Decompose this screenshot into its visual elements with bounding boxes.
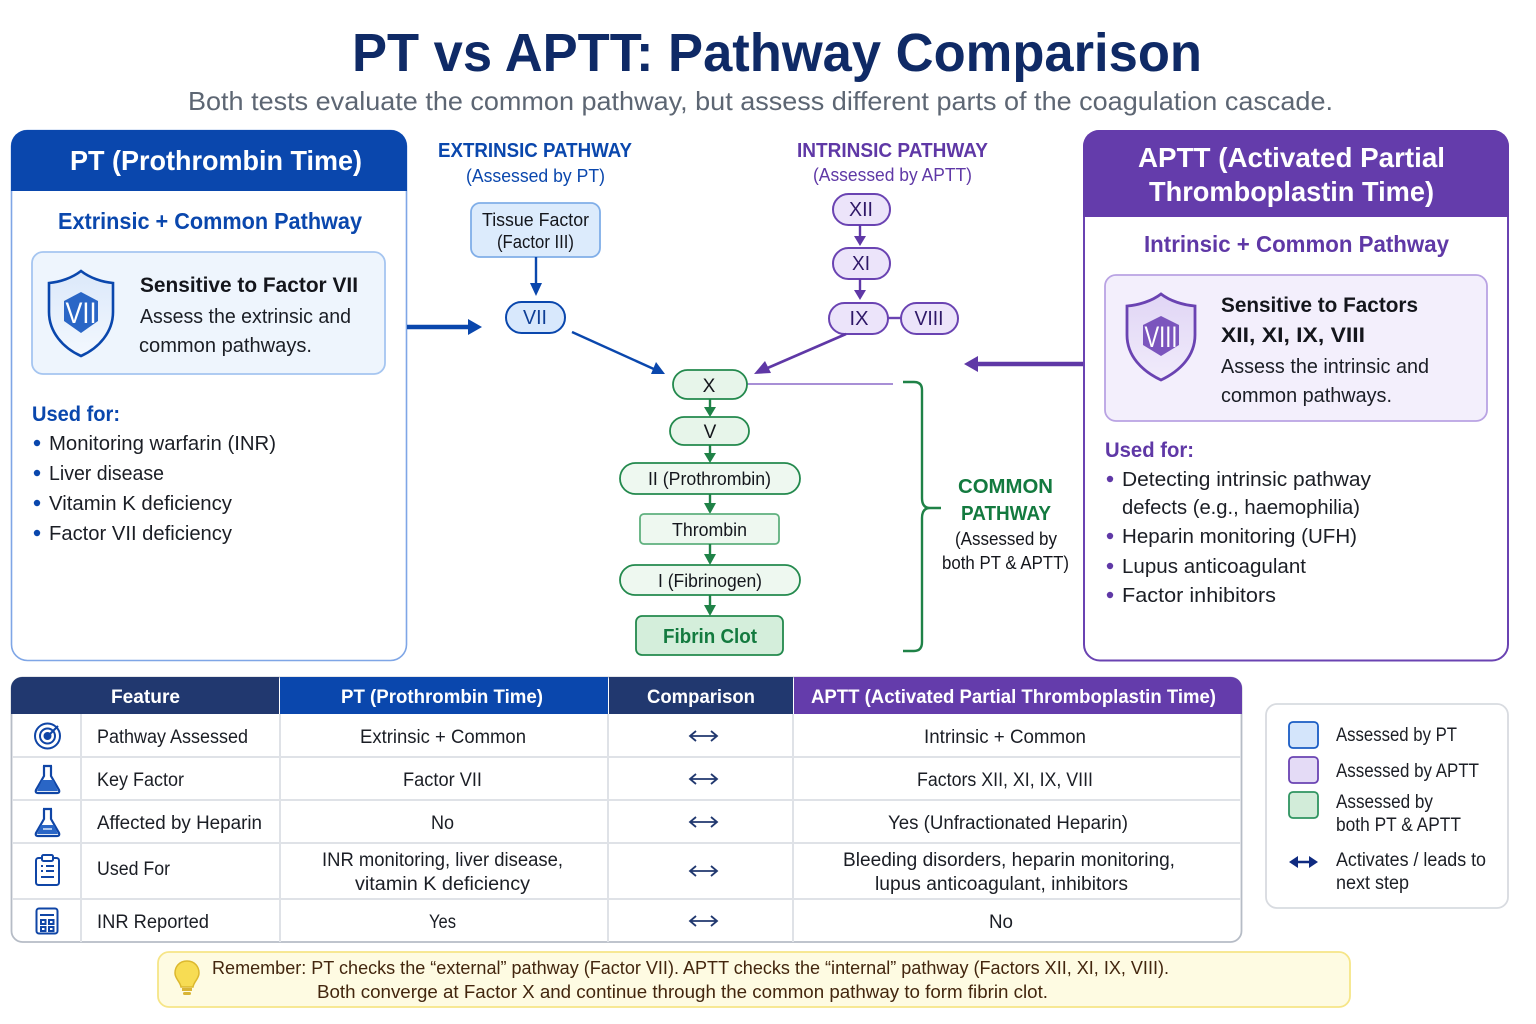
- node: fibrin clot: Fibrin Clot: [663, 626, 757, 648]
- table row: INR reported: [36, 908, 1013, 934]
- node: I fibrinogen: I (Fibrinogen): [658, 571, 762, 591]
- node: thrombin: Thrombin: [672, 520, 747, 540]
- table row: pathway assessed: [35, 724, 1086, 748]
- card text: Assess the extrinsic and: [140, 305, 351, 328]
- table row: used for: Used For: [97, 859, 171, 880]
- node: tissue factor: (Factor III): [497, 232, 574, 252]
- APTT header: Thromboplastin Time): [1149, 176, 1434, 207]
- table row: pathway assessed: Intrinsic + Common: [924, 727, 1086, 748]
- table row: INR reported: No: [989, 912, 1013, 933]
- arrow: XII to XI: [854, 225, 866, 246]
- icon: flask with liquid: [36, 809, 59, 836]
- node: IX: IX: [850, 308, 868, 330]
- table row: used for: lupus anticoagulant, inhibitors: [875, 874, 1128, 895]
- legend: assessed by PT: [1289, 722, 1457, 748]
- node: X: [673, 370, 747, 399]
- PT used for list: Monitoring warfarin (INR): [49, 432, 276, 455]
- table row: key factor: Factors XII, XI, IX, VIII: [917, 770, 1093, 791]
- legend: activates arrow: [1289, 850, 1486, 894]
- heading: extrinsic pathway: (Assessed by PT): [466, 165, 605, 186]
- PT header: [11, 130, 407, 191]
- label: common pathway: PATHWAY: [961, 502, 1051, 525]
- arrow: II to thrombin: [704, 494, 716, 514]
- node: XI: XI: [852, 253, 870, 275]
- heading: extrinsic pathway: EXTRINSIC PATHWAY: [438, 140, 633, 162]
- table row: affected by heparin: Affected by Heparin: [97, 813, 262, 834]
- icon: calculator: [36, 908, 58, 934]
- callout text: Remember: PT checks the “external” pathway (Factor VII). APTT checks the “internal” pathway (Factors XII, XI, IX, VIII).: [212, 958, 1169, 978]
- PT sensitivity card: [32, 252, 385, 374]
- comparison table: [11, 677, 1242, 942]
- table header row: APTT (Activated Partial Thromboplastin Time): [811, 687, 1216, 708]
- node: VII: [506, 302, 565, 333]
- arrow: VII to X: [572, 332, 665, 374]
- connector: IX to VIII: [888, 317, 902, 319]
- node: XII: [833, 194, 890, 225]
- node: VII: VII: [523, 307, 547, 329]
- APTT used for list: Used for:: [1105, 438, 1194, 462]
- table row: affected by heparin: No: [431, 813, 454, 834]
- APTT used for list: [1105, 438, 1372, 607]
- icon: light bulb: [175, 961, 199, 995]
- comparison column arrows: [690, 731, 717, 926]
- arrow: thrombin to I: [704, 544, 716, 565]
- PT used for list: Liver disease: [49, 462, 164, 485]
- node: X: X: [703, 376, 716, 397]
- table row: key factor: Key Factor: [97, 770, 185, 791]
- bracket: common pathway: [903, 382, 941, 651]
- panel: PT: [11, 130, 407, 660]
- node: V: V: [704, 422, 717, 443]
- legend: assessed by PT: Assessed by PT: [1336, 725, 1457, 746]
- heading: intrinsic pathway: [797, 140, 989, 185]
- table row: used for: [36, 850, 1175, 895]
- heading: extrinsic pathway: [438, 140, 633, 186]
- legend: activates arrow: next step: [1336, 873, 1409, 894]
- table row: used for: INR monitoring, liver disease,: [322, 850, 563, 871]
- PT subheading: Extrinsic + Common Pathway: [58, 208, 362, 234]
- table header row: PT (Prothrombin Time): [341, 687, 543, 708]
- card heading: [1221, 293, 1418, 347]
- PT used for list: Factor VII deficiency: [49, 522, 233, 545]
- APTT used for list: Heparin monitoring (UFH): [1122, 525, 1357, 548]
- callout text: [212, 958, 1169, 1002]
- table row: INR reported: Yes: [429, 912, 456, 933]
- callout text: Both converge at Factor X and continue through the common pathway to form fibrin clot.: [317, 982, 1048, 1002]
- legend: assessed by both: [1289, 792, 1461, 836]
- PT header: PT (Prothrombin Time): [70, 145, 362, 176]
- icon: clipboard: [36, 855, 59, 885]
- arrow: PT panel to extrinsic pathway: [407, 319, 482, 335]
- table header row: Feature: [111, 687, 180, 708]
- arrow: IX to X: [754, 334, 846, 374]
- legend: assessed by APTT: Assessed by APTT: [1336, 761, 1479, 782]
- heading: intrinsic pathway: (Assessed by APTT): [813, 164, 972, 185]
- table row: INR reported: INR Reported: [97, 912, 209, 933]
- subtitle: Both tests evaluate the common pathway, but assess different parts of the coagulation cascade.: [188, 86, 1333, 116]
- icon: shield VII: [49, 271, 113, 356]
- arrow: APTT panel to intrinsic pathway: [964, 356, 1084, 372]
- node: VIII: [901, 303, 958, 334]
- table header row: Comparison: [647, 687, 755, 708]
- APTT subheading: Intrinsic + Common Pathway: [1144, 231, 1449, 257]
- arrow: V to II: [704, 445, 716, 463]
- legend: assessed by APTT: [1289, 757, 1479, 783]
- arrow: I to fibrin clot: [704, 595, 716, 616]
- node: XII: XII: [849, 199, 873, 221]
- icon: shield VIII: [1127, 294, 1195, 380]
- arrow: XI to IX: [854, 279, 866, 300]
- node: I fibrinogen: [620, 565, 800, 595]
- label: common pathway: both PT & APTT): [942, 553, 1069, 573]
- PT used for list: [32, 402, 276, 545]
- node: IX: [829, 303, 888, 334]
- node: V: [670, 417, 749, 445]
- callout: remember: [158, 952, 1350, 1007]
- APTT used for list: Lupus anticoagulant: [1122, 555, 1306, 578]
- card text: [1221, 355, 1429, 407]
- table row: pathway assessed: Extrinsic + Common: [360, 727, 526, 748]
- table row: key factor: Factor VII: [403, 770, 482, 791]
- connector: X to common pathway bracket: [747, 383, 893, 385]
- legend: [1266, 704, 1508, 908]
- PT used for list: Vitamin K deficiency: [49, 492, 233, 515]
- table header row: [11, 677, 1242, 714]
- table row: affected by heparin: [36, 809, 1128, 836]
- arrow: X to V: [704, 399, 716, 417]
- label: common pathway: (Assessed by: [955, 529, 1057, 549]
- APTT sensitivity card: [1105, 275, 1487, 421]
- title: PT vs APTT: Pathway Comparison: [352, 23, 1202, 83]
- PT used for list: Used for:: [32, 402, 120, 426]
- legend: assessed by both: both PT & APTT: [1336, 815, 1461, 836]
- icon: flask: [36, 766, 59, 793]
- card heading: Sensitive to Factor VII: [140, 273, 358, 297]
- APTT used for list: Detecting intrinsic pathway: [1122, 468, 1372, 491]
- legend: activates arrow: Activates / leads to: [1336, 850, 1486, 871]
- icon: target: [35, 724, 60, 748]
- label: common pathway: [942, 475, 1069, 573]
- card heading: XII, XI, IX, VIII: [1221, 323, 1365, 347]
- card text: common pathways.: [1221, 384, 1392, 407]
- APTT used for list: defects (e.g., haemophilia): [1122, 496, 1360, 519]
- table row: key factor: [36, 766, 1093, 793]
- node: II prothrombin: II (Prothrombin): [648, 469, 771, 489]
- label: common pathway: COMMON: [958, 475, 1053, 498]
- APTT header: [1083, 130, 1509, 217]
- table row: used for: vitamin K deficiency: [355, 874, 531, 895]
- table row: affected by heparin: Yes (Unfractionated Heparin): [888, 813, 1128, 834]
- card text: common pathways.: [139, 334, 312, 357]
- table row: pathway assessed: Pathway Assessed: [97, 727, 248, 748]
- table row: used for: Bleeding disorders, heparin monitoring,: [843, 850, 1175, 871]
- node: fibrin clot: [636, 616, 783, 655]
- arrow: tissue factor to VII: [530, 257, 542, 296]
- node: XI: [833, 248, 890, 279]
- card text: Assess the intrinsic and: [1221, 355, 1429, 378]
- APTT header: APTT (Activated Partial: [1138, 142, 1445, 173]
- node: tissue factor: [471, 203, 600, 257]
- node: tissue factor: Tissue Factor: [482, 209, 589, 230]
- icon: shield VII: VII: [66, 297, 96, 330]
- node: VIII: VIII: [914, 308, 944, 330]
- node: II prothrombin: [620, 463, 800, 494]
- heading: intrinsic pathway: INTRINSIC PATHWAY: [797, 140, 989, 162]
- card heading: Sensitive to Factors: [1221, 293, 1418, 317]
- node: thrombin: [640, 514, 779, 544]
- card text: [139, 305, 351, 357]
- panel: APTT: [1083, 130, 1509, 660]
- APTT used for list: Factor inhibitors: [1122, 584, 1276, 607]
- legend: assessed by both: Assessed by: [1336, 792, 1433, 813]
- icon: shield VIII: VIII: [1144, 321, 1178, 354]
